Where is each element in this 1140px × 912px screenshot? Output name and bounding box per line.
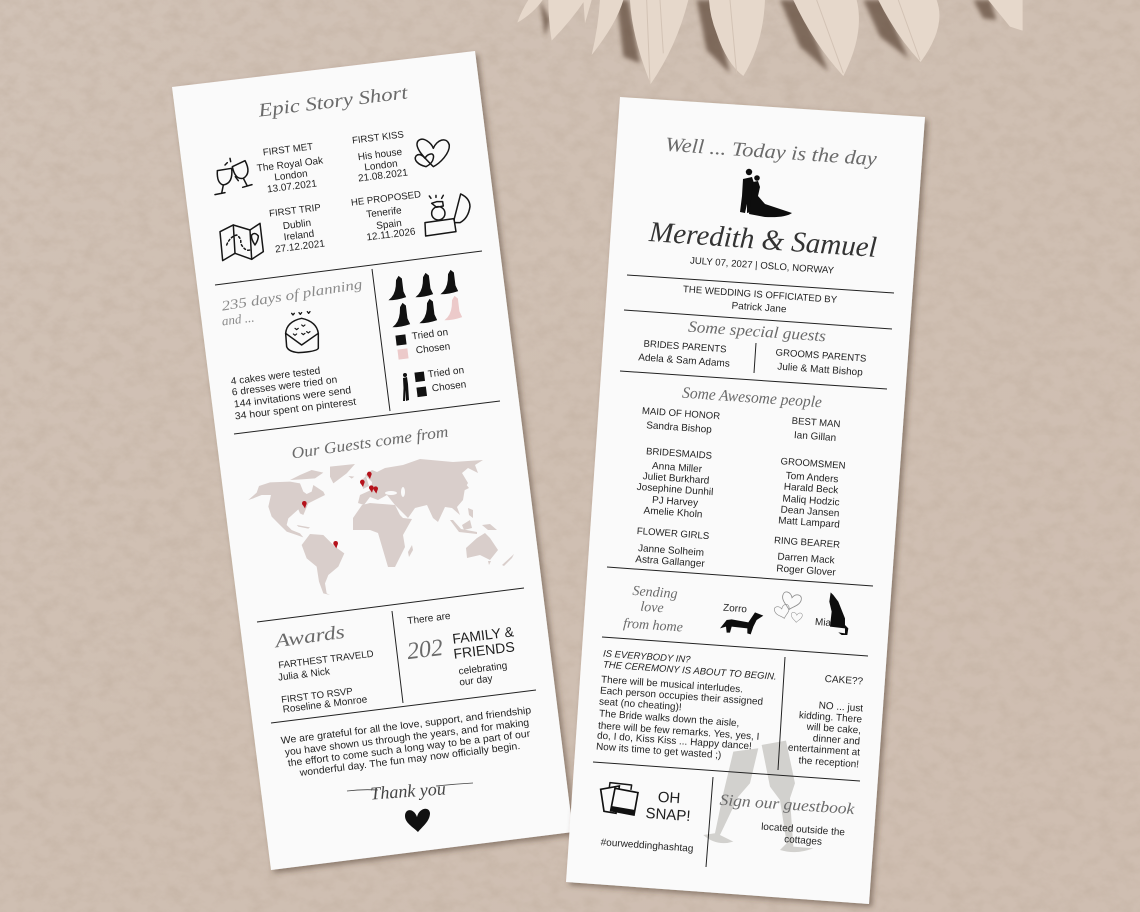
icon: outlined hearts bbox=[774, 591, 803, 623]
text: guest count: There are bbox=[407, 611, 452, 627]
text: awards: FARTHEST TRAVELD bbox=[278, 649, 374, 671]
text: planning stats: 4 cakes were tested bbox=[230, 366, 321, 387]
text: wedding party right column: Maliq Hodzic bbox=[782, 494, 840, 508]
text: officiant: Patrick Jane bbox=[731, 301, 787, 315]
text: first met: London bbox=[274, 169, 308, 183]
text: ceremony bbox=[596, 649, 777, 761]
text: ceremony: IS EVERYBODY IN? bbox=[603, 649, 692, 666]
legend: suits: Tried on bbox=[427, 365, 465, 380]
divider lines bbox=[215, 251, 500, 434]
text: first met: 13.07.2021 bbox=[266, 178, 318, 196]
legend: dresses: Chosen bbox=[415, 341, 451, 356]
map: the Americas bbox=[248, 464, 355, 595]
text: he proposed bbox=[350, 189, 422, 243]
text: cake: dinner and bbox=[812, 733, 860, 747]
text: wedding party right column: BEST MAN bbox=[791, 416, 841, 430]
heading: Sending love from home: from home bbox=[623, 616, 683, 636]
text: cake: CAKE?? bbox=[824, 674, 864, 688]
heading: Sending love from home bbox=[623, 584, 683, 636]
text: planning stats: 144 invitations were send bbox=[233, 385, 352, 410]
card: left story card bbox=[172, 51, 573, 870]
text: wedding party right column: Matt Lampard bbox=[778, 515, 840, 531]
text: ceremony: there will be few remarks. Yes, yes, I bbox=[598, 721, 760, 743]
text: cake: kidding. There bbox=[799, 710, 863, 726]
heading: Epic Story Short: Epic Story Short bbox=[256, 82, 410, 122]
card paper bbox=[172, 51, 573, 870]
text: he proposed: HE PROPOSED bbox=[350, 189, 422, 209]
text: first kiss: His house bbox=[357, 147, 403, 163]
world map with pins bbox=[248, 459, 514, 595]
text: wedding party left column: Sandra Bishop bbox=[646, 420, 713, 436]
text: cake: will be cake, bbox=[805, 722, 861, 736]
card: right program card bbox=[566, 97, 925, 904]
text: first kiss: 21.08.2021 bbox=[357, 167, 409, 185]
text: guest count: our day bbox=[459, 674, 493, 688]
text: oh snap: SNAP! bbox=[645, 805, 691, 825]
text: wedding party right column bbox=[774, 416, 846, 579]
heading: and: and ... bbox=[221, 310, 255, 328]
text: cake: entertainment at bbox=[788, 742, 861, 759]
text: first met: FIRST MET bbox=[262, 141, 314, 159]
legend: suits: Chosen bbox=[431, 379, 467, 394]
text: officiant bbox=[683, 284, 838, 315]
text: parents: Julie & Matt Bishop bbox=[777, 362, 864, 379]
text: first trip: Dublin bbox=[282, 218, 312, 232]
text: wedding party left column: MAID OF HONOR bbox=[642, 406, 721, 422]
text: cake bbox=[788, 674, 864, 770]
text: wedding party right column: Roger Glover bbox=[776, 563, 837, 579]
text: wedding party right column: GROOMSMEN bbox=[780, 456, 846, 472]
label: Mia: Mia bbox=[815, 617, 832, 629]
text: parents bbox=[638, 339, 867, 379]
text: planning stats: 34 hour spent on pinterest bbox=[234, 397, 357, 422]
text: he proposed: Spain bbox=[376, 218, 402, 232]
card paper bbox=[566, 97, 925, 904]
text: guestbook location: cottages bbox=[784, 834, 822, 848]
text: guest count bbox=[406, 611, 515, 688]
text: first trip: 27.12.2021 bbox=[274, 238, 326, 256]
text: wedding party left column: BRIDESMAIDS bbox=[646, 446, 712, 462]
text: ceremony: seat (no cheating)! bbox=[599, 697, 682, 713]
text: first kiss: London bbox=[364, 159, 398, 173]
text: thank-you paragraph: We are grateful for all the love, support, and friendship bbox=[280, 705, 532, 747]
text: parents: Adela & Sam Adams bbox=[638, 352, 730, 370]
text: first trip bbox=[269, 202, 326, 256]
heading: Well ... Today is the day: Well ... Today is the day bbox=[664, 134, 878, 170]
text: awards: FIRST TO RSVP bbox=[281, 686, 353, 706]
text: guest count: celebrating bbox=[458, 661, 508, 677]
divider lines bbox=[593, 275, 894, 867]
heading: Awards: Awards bbox=[271, 622, 346, 653]
text: thank-you paragraph: wonderful day. The fun may now officially begin. bbox=[298, 741, 521, 779]
legend: dresses bbox=[395, 327, 451, 360]
text: he proposed: 12.11.2026 bbox=[366, 226, 417, 243]
text: thank-you paragraph bbox=[280, 705, 532, 779]
icon: instant photos bbox=[601, 783, 638, 815]
text: ceremony: The Bride walks down the aisle, bbox=[599, 709, 740, 729]
text: wedding party left column: Janne Solheim bbox=[638, 543, 704, 559]
text: officiant: THE WEDDING IS OFFICIATED BY bbox=[683, 284, 838, 306]
icon: black heart bbox=[405, 809, 430, 832]
text: parents: GROOMS PARENTS bbox=[775, 347, 867, 365]
text: oh snap: #ourweddinghashtag bbox=[600, 837, 694, 855]
text: wedding party right column: Ian Gillan bbox=[794, 430, 836, 444]
text: first met bbox=[256, 141, 325, 196]
heading: Sending love from home: Sending bbox=[632, 584, 678, 602]
text: wedding party left column: Anna Miller bbox=[652, 461, 703, 475]
text: guest count: FRIENDS bbox=[453, 638, 515, 662]
icon: bride and groom silhouette bbox=[740, 169, 792, 217]
icons: six wedding dresses bbox=[386, 269, 462, 328]
text: first kiss: FIRST KISS bbox=[351, 129, 405, 147]
text: thank-you paragraph: the effort to come such a long way to be a part of our bbox=[287, 729, 531, 769]
text: first trip: FIRST TRIP bbox=[269, 202, 321, 220]
text: first met: The Royal Oak bbox=[256, 155, 325, 175]
heading: 235 days of planning: 235 days of planning bbox=[221, 277, 363, 315]
icon: ring in box bbox=[425, 194, 470, 236]
text: wedding party right column: Dean Jansen bbox=[780, 504, 840, 520]
text: guestbook location bbox=[761, 822, 846, 848]
label: Zorro: Zorro bbox=[723, 603, 748, 615]
legend: dresses: Tried on bbox=[411, 327, 449, 342]
text: wedding party left column: Juliet Burkhard bbox=[642, 471, 710, 487]
text: ceremony: Now its time to get wasted ;) bbox=[596, 742, 722, 761]
text: wedding party left column: Amelie Kholn bbox=[643, 505, 703, 521]
map: Europe, Asia, Africa, Oceania bbox=[353, 459, 514, 567]
icon: champagne flutes watermark bbox=[703, 741, 813, 852]
text: ceremony: Each person occupies their assigned bbox=[600, 686, 763, 708]
heading: Some special guests: Some special guests bbox=[688, 319, 826, 345]
text: wedding party left column: Josephine Dunhil bbox=[636, 482, 714, 498]
legend: suits bbox=[414, 365, 467, 397]
text: he proposed: Tenerife bbox=[366, 205, 403, 221]
icon: groom figure bbox=[403, 373, 409, 401]
heading: Thank you bbox=[347, 778, 473, 804]
icon: clinking wine glasses bbox=[215, 158, 252, 195]
dried palm leaves bbox=[517, 0, 1023, 84]
text: wedding party left column: Astra Gallanger bbox=[635, 554, 706, 570]
icon: two hearts bbox=[415, 139, 449, 167]
heading: Sending love from home: love bbox=[640, 600, 664, 616]
heading: Our Guests come from: Our Guests come from bbox=[291, 424, 449, 462]
text: date and place: JULY 07, 2027 | OSLO, NORWAY bbox=[690, 255, 835, 277]
text: wedding party right column: RING BEARER bbox=[774, 535, 840, 551]
icon: cat bbox=[829, 592, 848, 635]
text: oh snap bbox=[600, 789, 694, 855]
heading: Sign our guestbook: Sign our guestbook bbox=[719, 792, 856, 818]
text: guest count: 202 bbox=[406, 635, 444, 665]
text: awards bbox=[277, 649, 374, 716]
heading: couple names: Meredith & Samuel bbox=[647, 216, 878, 264]
text: ceremony: THE CEREMONY IS ABOUT TO BEGIN. bbox=[603, 660, 777, 683]
icon: envelope with hearts bbox=[286, 312, 318, 353]
map: red location pins bbox=[302, 472, 378, 548]
heading: Thank you: Thank you bbox=[370, 778, 446, 804]
text: planning stats: 6 dresses were tried on bbox=[231, 375, 338, 398]
text: awards: Julia & Nick bbox=[277, 666, 332, 684]
text: oh snap: OH bbox=[657, 789, 681, 807]
text: ceremony: There will be musical interludes. bbox=[601, 675, 743, 695]
text: planning stats bbox=[230, 366, 357, 422]
text: wedding party right column: Tom Anders bbox=[785, 471, 839, 485]
icon: dachshund bbox=[720, 612, 763, 634]
text: wedding party left column bbox=[635, 406, 721, 570]
icon: folded map with pin bbox=[220, 223, 263, 261]
text: guestbook location: located outside the bbox=[761, 822, 846, 838]
text: wedding party right column: Harald Beck bbox=[783, 482, 840, 496]
text: wedding party right column: Darren Mack bbox=[777, 552, 836, 567]
text: parents: BRIDES PARENTS bbox=[643, 339, 727, 355]
text: first kiss bbox=[351, 129, 409, 185]
text: thank-you paragraph: you have shown us through the years, and for making bbox=[284, 718, 530, 758]
text: wedding party left column: PJ Harvey bbox=[652, 495, 698, 509]
text: ceremony: do, I do, Kiss Kiss ... Happy dance! bbox=[597, 731, 752, 752]
heading: Some Awesome people: Some Awesome people bbox=[682, 385, 822, 411]
text: cake: NO ... just bbox=[818, 700, 864, 715]
divider lines bbox=[257, 588, 536, 723]
text: awards: Roseline & Monroe bbox=[282, 694, 368, 716]
text: first trip: Ireland bbox=[283, 229, 315, 243]
text: guest count: FAMILY & bbox=[451, 623, 515, 647]
text: wedding party left column: FLOWER GIRLS bbox=[636, 526, 710, 542]
text: cake: the reception! bbox=[798, 755, 859, 770]
